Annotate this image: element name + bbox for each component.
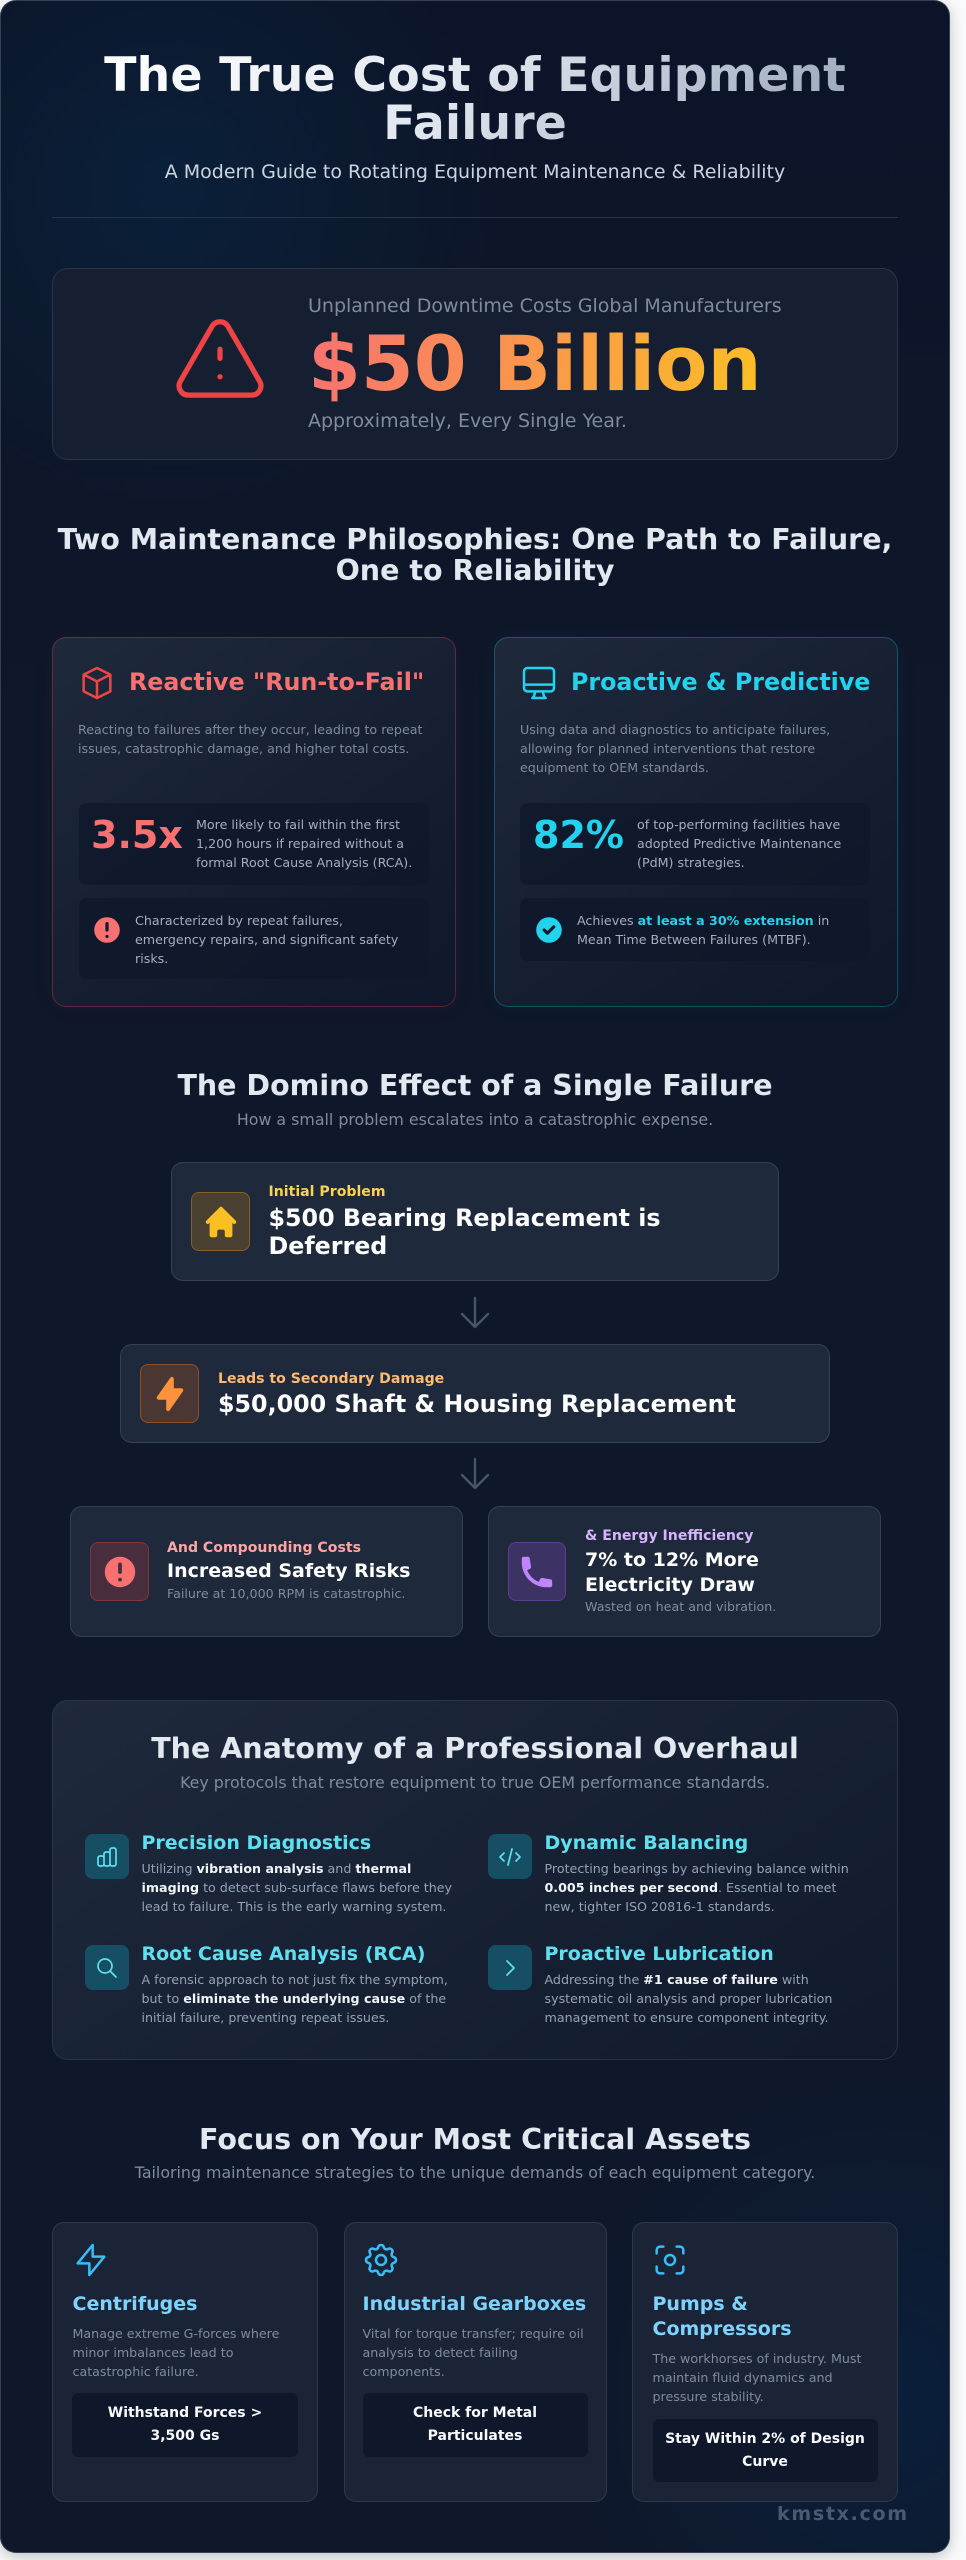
callout: MTBF <box>520 898 870 961</box>
icon: warning triangle <box>176 319 264 398</box>
heading: two philosophies: Two Maintenance Philosophies: One Path to Failure, <box>58 522 892 556</box>
card text: catastrophic failure. <box>72 2364 199 2379</box>
item: dynamic balancing <box>488 1832 849 1914</box>
card title: Industrial Gearboxes <box>362 2293 586 2315</box>
icon: search <box>85 1945 129 1990</box>
step title: 7% to 12% More <box>585 1549 759 1571</box>
callout text: Mean Time Between Failures (MTBF). <box>577 932 811 947</box>
card text: Vital for torque transfer; require oil <box>362 2326 584 2341</box>
text: proactive description: equipment to OEM standards. <box>520 760 709 775</box>
step note: Failure at 10,000 RPM is catastrophic. <box>167 1586 405 1601</box>
item text: imaging to detect sub-surface flaws before they <box>142 1880 452 1895</box>
step: energy inefficiency <box>488 1506 880 1637</box>
text: proactive description <box>520 722 830 775</box>
text: proactive description: Using data and diagnostics to anticipate failures, <box>520 722 830 737</box>
text: reactive description: Reacting to failures after they occur, leading to repeat <box>78 722 422 737</box>
callout text: risks. <box>135 951 168 966</box>
stat text: of top-performing facilities have <box>637 817 840 832</box>
stat text <box>196 817 412 870</box>
step title: Deferred <box>268 1232 387 1260</box>
card text: maintain fluid dynamics and <box>652 2370 832 2385</box>
text: reactive description <box>78 722 422 756</box>
step label: Initial Problem <box>268 1184 386 1200</box>
icon: house <box>191 1192 250 1251</box>
step: safety risks <box>70 1506 462 1637</box>
title: The True Cost of Equipment <box>104 48 846 102</box>
subtitle: A Modern Guide to Rotating Equipment Maintenance & Reliability <box>165 161 785 183</box>
icon: phone <box>508 1542 566 1601</box>
heading: proactive: Proactive & Predictive <box>571 668 870 696</box>
stat text: 1,200 hours if repaired without a <box>196 836 404 851</box>
hero footnote: Approximately, Every Single Year. <box>308 410 627 432</box>
item text: lead to failure. This is the early warning system. <box>142 1899 446 1914</box>
icon: bolt <box>140 1364 199 1423</box>
step label: And Compounding Costs <box>167 1540 361 1556</box>
card spec: Withstand Forces > <box>108 2405 262 2421</box>
text: proactive description: allowing for planned interventions that restore <box>520 741 815 756</box>
item text: new, tighter ISO 20816-1 standards. <box>544 1899 775 1914</box>
callout text: Characterized by repeat failures, <box>135 913 343 928</box>
card: gearboxes <box>344 2222 607 2502</box>
item: root cause analysis <box>85 1943 448 2025</box>
item text <box>544 1972 832 2025</box>
item title: Dynamic Balancing <box>544 1832 748 1854</box>
item text: systematic oil analysis and proper lubrication <box>544 1991 832 2006</box>
panel: hero stat <box>52 268 898 460</box>
card title <box>652 2293 792 2340</box>
card text: The workhorses of industry. Must <box>652 2351 861 2366</box>
heading: focus: Focus on Your Most Critical Assets <box>199 2123 751 2156</box>
card spec: Stay Within 2% of Design <box>665 2431 865 2447</box>
card: centrifuges <box>52 2222 318 2502</box>
stat text: More likely to fail within the first <box>196 817 400 832</box>
callout text <box>135 913 398 966</box>
card text: minor imbalances lead to <box>72 2345 233 2360</box>
item text: management to ensure component integrity. <box>544 2010 829 2025</box>
step: secondary damage <box>120 1344 830 1443</box>
icon: cube <box>82 666 112 700</box>
stat number: 82% <box>533 813 624 857</box>
icon: alert circle <box>94 917 120 943</box>
card text: components. <box>362 2364 445 2379</box>
card title: Compressors <box>652 2318 792 2340</box>
card spec <box>362 2393 588 2457</box>
watermark: kmstx.com <box>777 2503 909 2525</box>
card spec: Particulates <box>428 2428 522 2444</box>
card text: Manage extreme G-forces where <box>72 2326 279 2341</box>
heading: two philosophies: One to Reliability <box>336 554 614 586</box>
subheading: focus: Tailoring maintenance strategies to the unique demands of each equipment category. <box>135 2162 815 2182</box>
icon: exclamation <box>90 1542 149 1601</box>
item: precision diagnostics <box>85 1832 452 1914</box>
item title: Precision Diagnostics <box>142 1832 371 1854</box>
step title <box>585 1549 759 1596</box>
step title <box>268 1204 661 1260</box>
icon: check circle <box>536 917 562 943</box>
item text: Utilizing vibration analysis and thermal <box>142 1861 411 1876</box>
icon: code <box>488 1834 532 1879</box>
card: pumps and compressors <box>632 2222 898 2502</box>
icon: scan circle <box>655 2245 685 2275</box>
item text <box>544 1861 849 1914</box>
step title: Increased Safety Risks <box>167 1560 410 1582</box>
item text: Protecting bearings by achieving balance within <box>544 1861 849 1876</box>
stat text: (PdM) strategies. <box>637 855 745 870</box>
item text <box>142 1972 448 2025</box>
hero label: Unplanned Downtime Costs Global Manufacturers <box>308 295 782 317</box>
item: proactive lubrication <box>488 1943 832 2025</box>
title <box>104 48 846 150</box>
card spec: 3,500 Gs <box>150 2428 219 2444</box>
callout text <box>577 913 829 947</box>
item title: Root Cause Analysis (RCA) <box>142 1943 425 1965</box>
heading: reactive: Reactive "Run-to-Fail" <box>129 668 424 696</box>
text: reactive description: issues, catastrophic damage, and higher total costs. <box>78 741 409 756</box>
card text <box>652 2351 862 2404</box>
card title: Pumps & <box>652 2293 748 2315</box>
subheading: domino: How a small problem escalates into a catastrophic expense. <box>237 1110 713 1128</box>
panel: anatomy of overhaul <box>52 1700 898 2060</box>
stat text <box>637 817 841 870</box>
item text: initial failure, preventing repeat issues. <box>142 2010 389 2025</box>
step title: $500 Bearing Replacement is <box>268 1204 661 1232</box>
step note: Wasted on heat and vibration. <box>585 1599 776 1614</box>
callout text: Achieves at least a 30% extension in <box>577 913 829 928</box>
subheading: anatomy: Key protocols that restore equipment to true OEM performance standards. <box>180 1772 770 1792</box>
icon: gear <box>364 2244 398 2276</box>
heading: domino effect: The Domino Effect of a Single Failure <box>177 1069 773 1102</box>
step: initial problem <box>171 1162 779 1281</box>
icon: bolt outline <box>76 2244 106 2276</box>
stat number: 3.5x <box>91 813 183 857</box>
heading: two philosophies <box>58 522 892 586</box>
step title: $50,000 Shaft & Housing Replacement <box>218 1390 736 1418</box>
step label: & Energy Inefficiency <box>585 1528 753 1544</box>
hero number: $50 Billion <box>308 319 762 408</box>
step title: Electricity Draw <box>585 1574 755 1596</box>
stat text: adopted Predictive Maintenance <box>637 836 841 851</box>
item text: but to eliminate the underlying cause of the <box>142 1991 446 2006</box>
callout: repeat failures <box>79 898 429 979</box>
card title: Centrifuges <box>72 2293 197 2315</box>
item text: A forensic approach to not just fix the symptom, <box>142 1972 448 1987</box>
card spec: Curve <box>742 2454 788 2470</box>
item text: 0.005 inches per second. Essential to meet <box>544 1880 836 1895</box>
card text <box>72 2326 279 2379</box>
heading: anatomy: The Anatomy of a Professional Overhaul <box>151 1732 799 1765</box>
card text: analysis to detect failing <box>362 2345 518 2360</box>
panel: reactive <box>52 637 456 1007</box>
arrow <box>460 1458 490 1490</box>
icon: chevron <box>488 1945 532 1990</box>
stat text: formal Root Cause Analysis (RCA). <box>196 855 412 870</box>
card spec <box>72 2393 298 2457</box>
stat: 3.5x <box>79 803 429 885</box>
callout text: emergency repairs, and significant safety <box>135 932 398 947</box>
item text: Addressing the #1 cause of failure with <box>544 1972 809 1987</box>
card text: pressure stability. <box>652 2389 764 2404</box>
item title: Proactive Lubrication <box>544 1943 774 1965</box>
stat: 82% <box>520 803 870 885</box>
icon: bar chart <box>85 1834 129 1879</box>
panel: proactive <box>494 637 898 1007</box>
card spec <box>652 2419 878 2482</box>
icon: monitor <box>522 666 556 700</box>
card text <box>362 2326 584 2379</box>
card spec: Check for Metal <box>413 2405 537 2421</box>
arrow <box>460 1296 490 1328</box>
step label: Leads to Secondary Damage <box>218 1371 444 1387</box>
item text <box>142 1861 452 1914</box>
title: Failure <box>383 96 567 150</box>
